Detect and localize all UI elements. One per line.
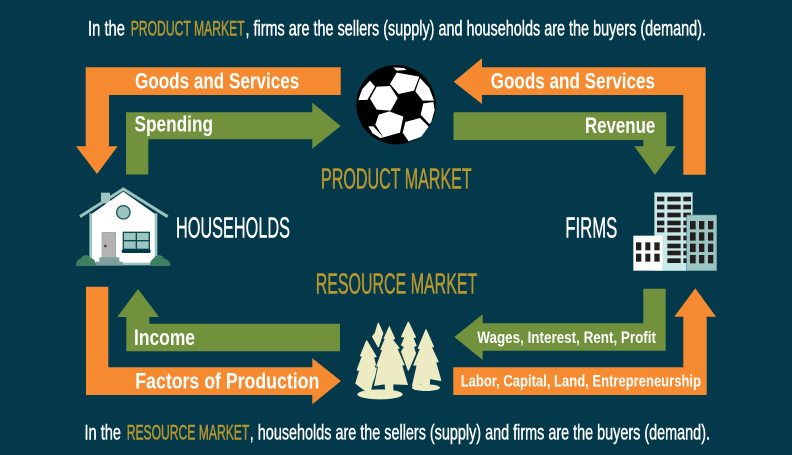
top sentence: In the	[88, 17, 125, 40]
arrow: spending	[126, 103, 341, 174]
icon: office buildings	[633, 192, 717, 271]
bottom sentence: In the	[84, 422, 121, 445]
arrow: goods and services from firms	[454, 58, 706, 175]
arrow: wages, interest, rent, profit: Wages, Interest, Rent, Profit	[477, 328, 656, 347]
heading: product market: PRODUCT MARKET	[321, 163, 472, 195]
arrow: labor, capital, land, entrepreneurship: Labor, Capital, Land, Entrepreneurship	[461, 372, 701, 391]
bottom sentence: RESOURCE MARKET	[127, 422, 249, 445]
icon: forest	[356, 322, 441, 399]
top sentence: PRODUCT MARKET	[131, 17, 245, 40]
icon: soccer ball	[356, 65, 436, 144]
arrow: factors of production: Factors of Production	[135, 368, 319, 393]
arrow: revenue	[454, 112, 676, 175]
arrow: wages, interest, rent, profit	[454, 289, 666, 360]
arrow: income: Income	[134, 325, 195, 350]
arrow: labor, capital, land, entrepreneurship	[453, 288, 716, 395]
arrow: income	[117, 289, 340, 351]
arrow: goods and services to households	[76, 67, 341, 174]
heading: resource market: RESOURCE MARKET	[316, 269, 477, 301]
bottom sentence	[84, 422, 710, 445]
label: firms: FIRMS	[565, 213, 617, 245]
arrow: factors of production	[86, 287, 341, 404]
arrow: spending: Spending	[134, 112, 213, 137]
icon: house	[76, 189, 170, 266]
arrow: goods and services to households: Goods and Services	[135, 68, 299, 93]
top sentence	[88, 17, 706, 40]
arrow: goods and services from firms: Goods and Services	[491, 68, 655, 93]
label: households: HOUSEHOLDS	[176, 213, 290, 245]
arrow: revenue: Revenue	[585, 113, 655, 138]
